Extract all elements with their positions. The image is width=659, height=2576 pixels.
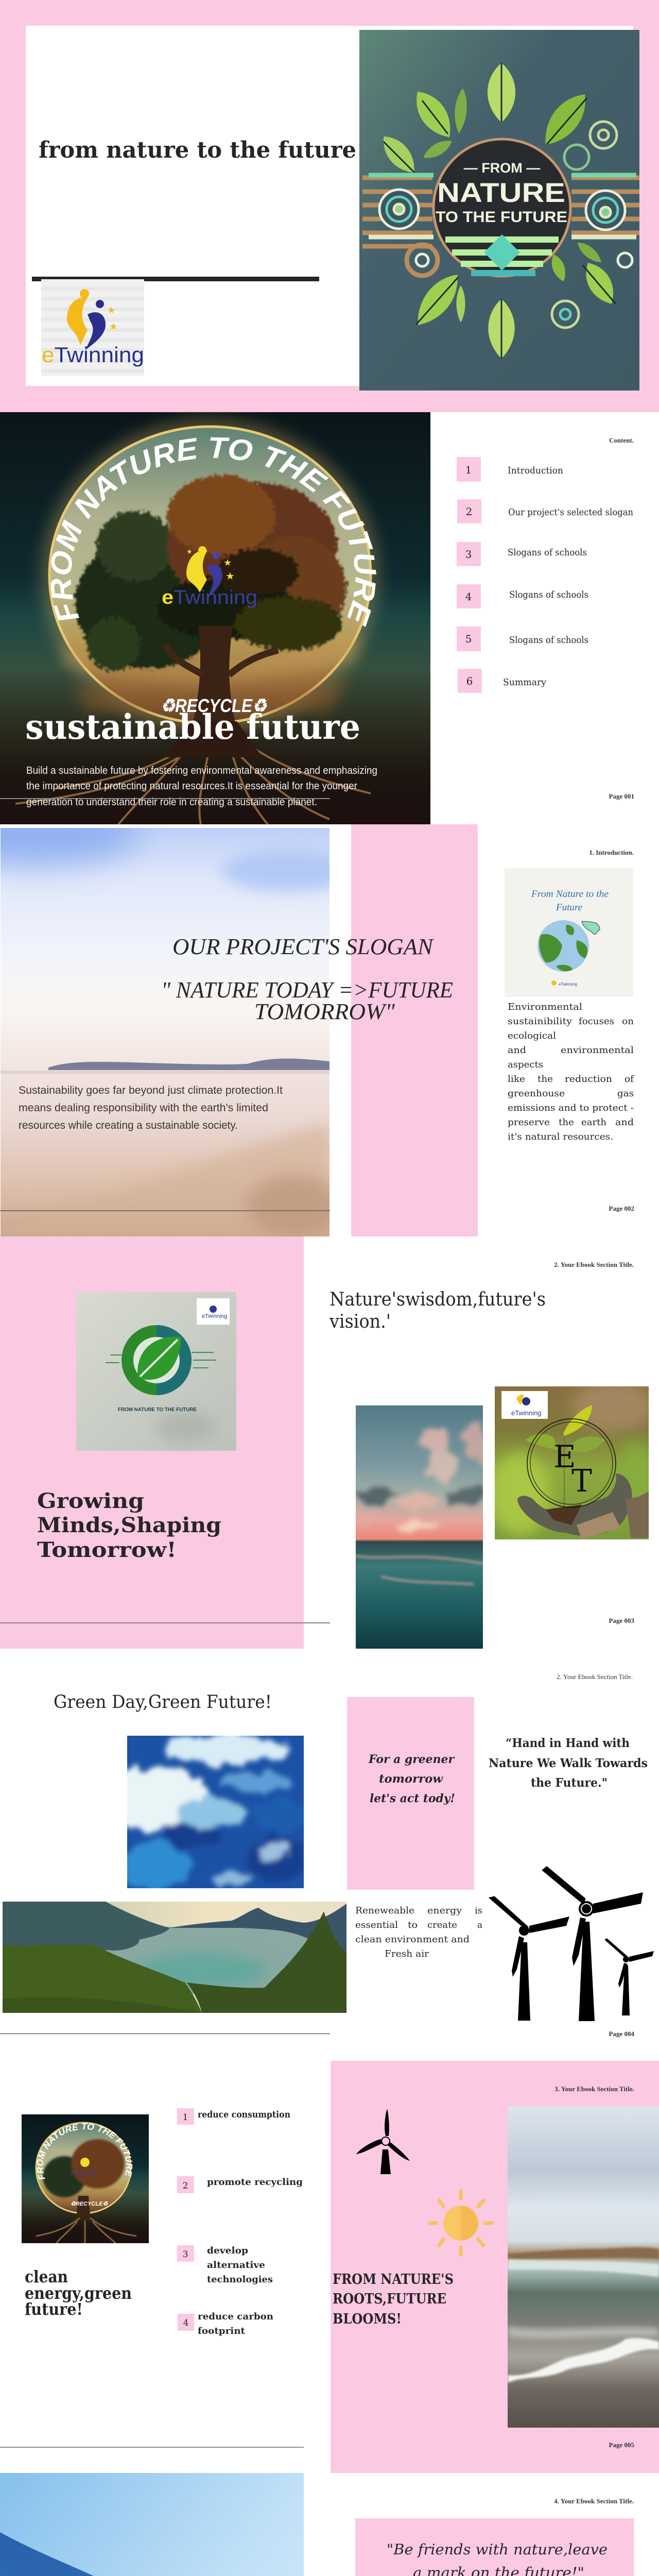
tree canopy xyxy=(75,475,346,671)
paragraph: environmental sustainability: like xyxy=(508,1074,525,1084)
paragraph: environmental sustainability: the xyxy=(559,1117,574,1128)
paragraph: environmental sustainability: of xyxy=(625,1074,634,1084)
icon: eTwinning logo on checker background: ★ xyxy=(109,321,117,332)
page 1: cover background xyxy=(0,0,659,412)
page number: Page 001 xyxy=(609,792,634,800)
heading: sustainable future: sustainable future xyxy=(25,707,360,747)
text: nature's wisdom: Nature'swisdom,future's xyxy=(330,1289,546,1310)
section label: 2. Your Ebook Section Title. xyxy=(557,1673,633,1681)
panel: be friends with nature xyxy=(355,2518,634,2576)
panel: greener tomorrow callout: For a greener xyxy=(368,1753,455,1766)
image: globe poster: eTwinning xyxy=(559,982,577,987)
contents list xyxy=(457,457,633,693)
panel: greener tomorrow callout xyxy=(347,1697,474,1890)
panel: greener tomorrow callout: tomorrow xyxy=(379,1772,443,1786)
contents list: 3 xyxy=(465,548,472,561)
paragraph: environmental sustainability: aspects xyxy=(508,1059,543,1070)
paragraph: environmental sustainability: and xyxy=(508,1045,526,1056)
panel: pink page 5 right xyxy=(331,2061,659,2473)
paragraph: sustainable future intro: generation to understand their role in creating a sustainable planet. xyxy=(26,796,317,808)
icon: eTwinning logo on tree: eTwinning xyxy=(162,587,257,608)
contents list: 6 xyxy=(466,675,473,687)
paragraph: environmental sustainability: reduction xyxy=(565,1074,612,1084)
text: renewable energy xyxy=(355,1905,482,1959)
icon: eTwinning logo on tree: ★ xyxy=(186,548,193,555)
icon: eTwinning logo on tree: ★ xyxy=(223,557,232,568)
image: beach xyxy=(1,828,330,1236)
quote: hand in hand: the Future." xyxy=(531,1776,608,1790)
text: renewable energy: a xyxy=(477,1920,482,1930)
image: sunset over sea xyxy=(356,1405,483,1649)
list: sustainability actions: footprint xyxy=(198,2326,246,2336)
paragraph: sustainability meaning: resources while creating a sustainable society. xyxy=(19,1120,238,1131)
page 4: pink panel xyxy=(0,1236,304,1649)
image: seedling in robot hand: T xyxy=(571,1463,592,1499)
contents list: Slogans of schools xyxy=(509,589,588,600)
image: From Nature to the Future poster: NATURE xyxy=(437,178,565,208)
contents list: Our project's selected slogan xyxy=(508,507,633,518)
image: seedling in robot hand: eTwinning xyxy=(511,1409,542,1417)
list: sustainability actions: 4 xyxy=(183,2318,188,2328)
page 2: tree hero image xyxy=(0,412,430,824)
paragraph: environmental sustainability: ecological xyxy=(508,1030,556,1041)
contents list: Slogans of schools xyxy=(509,635,588,646)
paragraph: environmental sustainability: it's natural resources. xyxy=(508,1131,613,1142)
image: leaf logo poster xyxy=(76,1292,236,1451)
list: sustainability actions: technologies xyxy=(207,2274,273,2285)
title: from nature to the future xyxy=(39,137,356,163)
image: globe poster: Future xyxy=(556,902,582,913)
image: From Nature to the Future poster xyxy=(359,30,639,391)
page number: Page 005 xyxy=(609,2441,634,2449)
icon: eTwinning logo on tree xyxy=(162,546,257,608)
slogan: TOMORROW" xyxy=(254,999,395,1024)
image: tree thumbnail xyxy=(22,2114,149,2243)
list: sustainability actions: 1 xyxy=(183,2112,188,2123)
slogan: " NATURE TODAY =>FUTURE xyxy=(161,977,453,1003)
text: renewable energy: Fresh air xyxy=(385,1948,429,1959)
paragraph: environmental sustainability: focuses xyxy=(579,1016,614,1027)
text: renewable energy: create xyxy=(427,1920,457,1930)
icon: eTwinning logo on tree: ★ xyxy=(226,571,235,582)
paragraph: sustainable future intro: Build a sustainable future by fostering environmental awareness and emphasizing xyxy=(26,765,377,776)
quote: hand in hand: “Hand in Hand with xyxy=(506,1736,630,1750)
image: tree thumbnail: eTwinning xyxy=(71,2170,96,2176)
image: blue wave xyxy=(0,2473,304,2576)
page number: Page 003 xyxy=(609,1617,634,1624)
image: seedling in robot hand: E xyxy=(553,1439,576,1475)
paragraph: environmental sustainability: sustainibility xyxy=(508,1016,573,1027)
paragraph: sustainability meaning: Sustainability goes far beyond just climate protection.It xyxy=(19,1084,283,1096)
paragraph: sustainability meaning xyxy=(19,1084,283,1131)
heading: growing minds: Tomorrow! xyxy=(37,1538,177,1562)
paragraph: environmental sustainability: environmental xyxy=(561,1045,634,1056)
image: mountain lake xyxy=(3,1902,346,2013)
heading: clean energy: clean xyxy=(25,2267,68,2286)
image: seedling in robot hand xyxy=(495,1386,649,1539)
section label: 2. Your Ebook Section Title. xyxy=(554,1261,634,1268)
icon: three wind turbines xyxy=(490,1868,654,2021)
heading: contents label: Content. xyxy=(609,436,634,444)
list: sustainability actions: promote recycling xyxy=(207,2177,303,2188)
icon: eTwinning logo on checker background: ★ xyxy=(107,305,115,315)
page number: Page 002 xyxy=(609,1205,634,1212)
text: renewable energy: Reneweable xyxy=(355,1905,414,1916)
heading: growing minds xyxy=(37,1489,221,1562)
paragraph: environmental sustainability: the xyxy=(537,1074,553,1084)
heading: nature's roots: ROOTS,FUTURE xyxy=(333,2291,446,2307)
paragraph: environmental sustainability: gas xyxy=(617,1088,634,1099)
heading: growing minds: Growing xyxy=(37,1489,144,1513)
paragraph: environmental sustainability: greenhouse xyxy=(508,1088,565,1099)
heading: clean energy xyxy=(25,2267,132,2319)
panel: greener tomorrow callout: let's act tody! xyxy=(370,1792,455,1805)
paragraph: sustainability meaning: means dealing responsibility with the earth's limited xyxy=(19,1102,268,1114)
contents list: Summary xyxy=(503,677,547,688)
list: sustainability actions: reduce consumption xyxy=(198,2109,290,2120)
text: nature's wisdom xyxy=(329,1289,546,1332)
page 3: pink column xyxy=(351,824,478,1236)
image: From Nature to the Future poster: — FROM — xyxy=(464,160,540,176)
paragraph: environmental sustainability: earth xyxy=(581,1117,606,1128)
image: ocean waves xyxy=(127,1736,304,1888)
list: sustainability actions: develop xyxy=(207,2245,248,2256)
list: sustainability actions xyxy=(177,2108,303,2336)
text: nature's wisdom: vision.' xyxy=(329,1311,391,1332)
text: renewable energy: to xyxy=(408,1920,418,1930)
contents list: Slogans of schools xyxy=(508,547,587,558)
icon: eTwinning logo on checker background: eTwinning xyxy=(42,343,144,367)
heading: growing minds: Minds,Shaping xyxy=(37,1513,221,1537)
paragraph: environmental sustainability xyxy=(508,1002,634,1142)
icon: sun xyxy=(428,2190,494,2256)
image: tree thumbnail: ♻RECYCLE♻ xyxy=(71,2201,108,2207)
slogan: OUR PROJECT'S SLOGAN xyxy=(172,934,435,959)
contents list: Introduction xyxy=(508,465,563,476)
icon: wind turbine xyxy=(356,2109,410,2174)
heavy divider under title xyxy=(32,277,319,281)
heading: clean energy: future! xyxy=(25,2299,83,2319)
heading: nature's roots: BLOOMS! xyxy=(333,2311,402,2327)
contents list: 1 xyxy=(465,464,472,476)
recycle label: ♻RECYCLE♻ xyxy=(161,695,267,716)
paragraph: environmental sustainability: emissions and to protect - xyxy=(508,1103,634,1113)
panel: be friends with nature: "Be friends with nature,leave xyxy=(387,2541,608,2558)
text: renewable energy: clean environment and xyxy=(355,1934,470,1945)
contents list: 5 xyxy=(465,633,472,645)
heading: clean energy: energy,green xyxy=(25,2283,132,2303)
list: sustainability actions: reduce carbon xyxy=(198,2311,273,2322)
page number: Page 004 xyxy=(609,2030,634,2038)
contents list: 4 xyxy=(465,590,472,603)
image: globe poster xyxy=(505,868,633,997)
image: From Nature to the Future poster: TO THE FUTURE xyxy=(436,209,567,226)
paragraph: sustainable future intro xyxy=(26,765,377,808)
image: leaf logo poster: FROM NATURE TO THE FUTURE xyxy=(118,1407,197,1413)
list: sustainability actions: 3 xyxy=(183,2249,188,2260)
heading: nature's roots xyxy=(333,2272,454,2327)
contents list: 2 xyxy=(466,505,472,518)
text: renewable energy: is xyxy=(475,1905,482,1916)
quote: hand in hand xyxy=(489,1736,648,1790)
paragraph: environmental sustainability: Environmental xyxy=(508,1002,582,1012)
paragraph: environmental sustainability: on xyxy=(622,1016,634,1027)
section label: 4. Your Ebook Section Title. xyxy=(554,2497,634,2505)
section label: 1. Introduction. xyxy=(589,849,634,856)
slogan xyxy=(161,934,453,1024)
image: shore with foam xyxy=(508,2106,659,2428)
heading: nature's roots: FROM NATURE'S xyxy=(333,2272,454,2287)
paragraph: sustainable future intro: the importance of protecting natural resources.It is esseantial for the younger xyxy=(26,781,357,792)
paragraph: environmental sustainability: and xyxy=(615,1117,634,1128)
text: renewable energy: energy xyxy=(427,1905,462,1916)
quote: hand in hand: Nature We Walk Towards xyxy=(489,1756,648,1770)
image: tree thumbnail: FROM NATURE TO THE FUTURE xyxy=(37,2123,133,2179)
paragraph: environmental sustainability: preserve xyxy=(508,1117,550,1128)
section label: 3. Your Ebook Section Title. xyxy=(554,2085,634,2093)
page 5 heading: green day: Green Day,Green Future! xyxy=(54,1692,272,1713)
text: renewable energy: essential xyxy=(355,1920,398,1930)
page 2: tree hero image: FROM NATURE TO THE FUTURE xyxy=(50,437,376,627)
list: sustainability actions: alternative xyxy=(207,2260,265,2270)
panel: cover white card xyxy=(26,26,633,386)
list: sustainability actions: 2 xyxy=(183,2181,188,2191)
image: globe poster: From Nature to the xyxy=(531,889,609,900)
icon: eTwinning logo on checker background xyxy=(41,279,144,376)
image: leaf logo poster: eTwinning xyxy=(202,1313,228,1319)
